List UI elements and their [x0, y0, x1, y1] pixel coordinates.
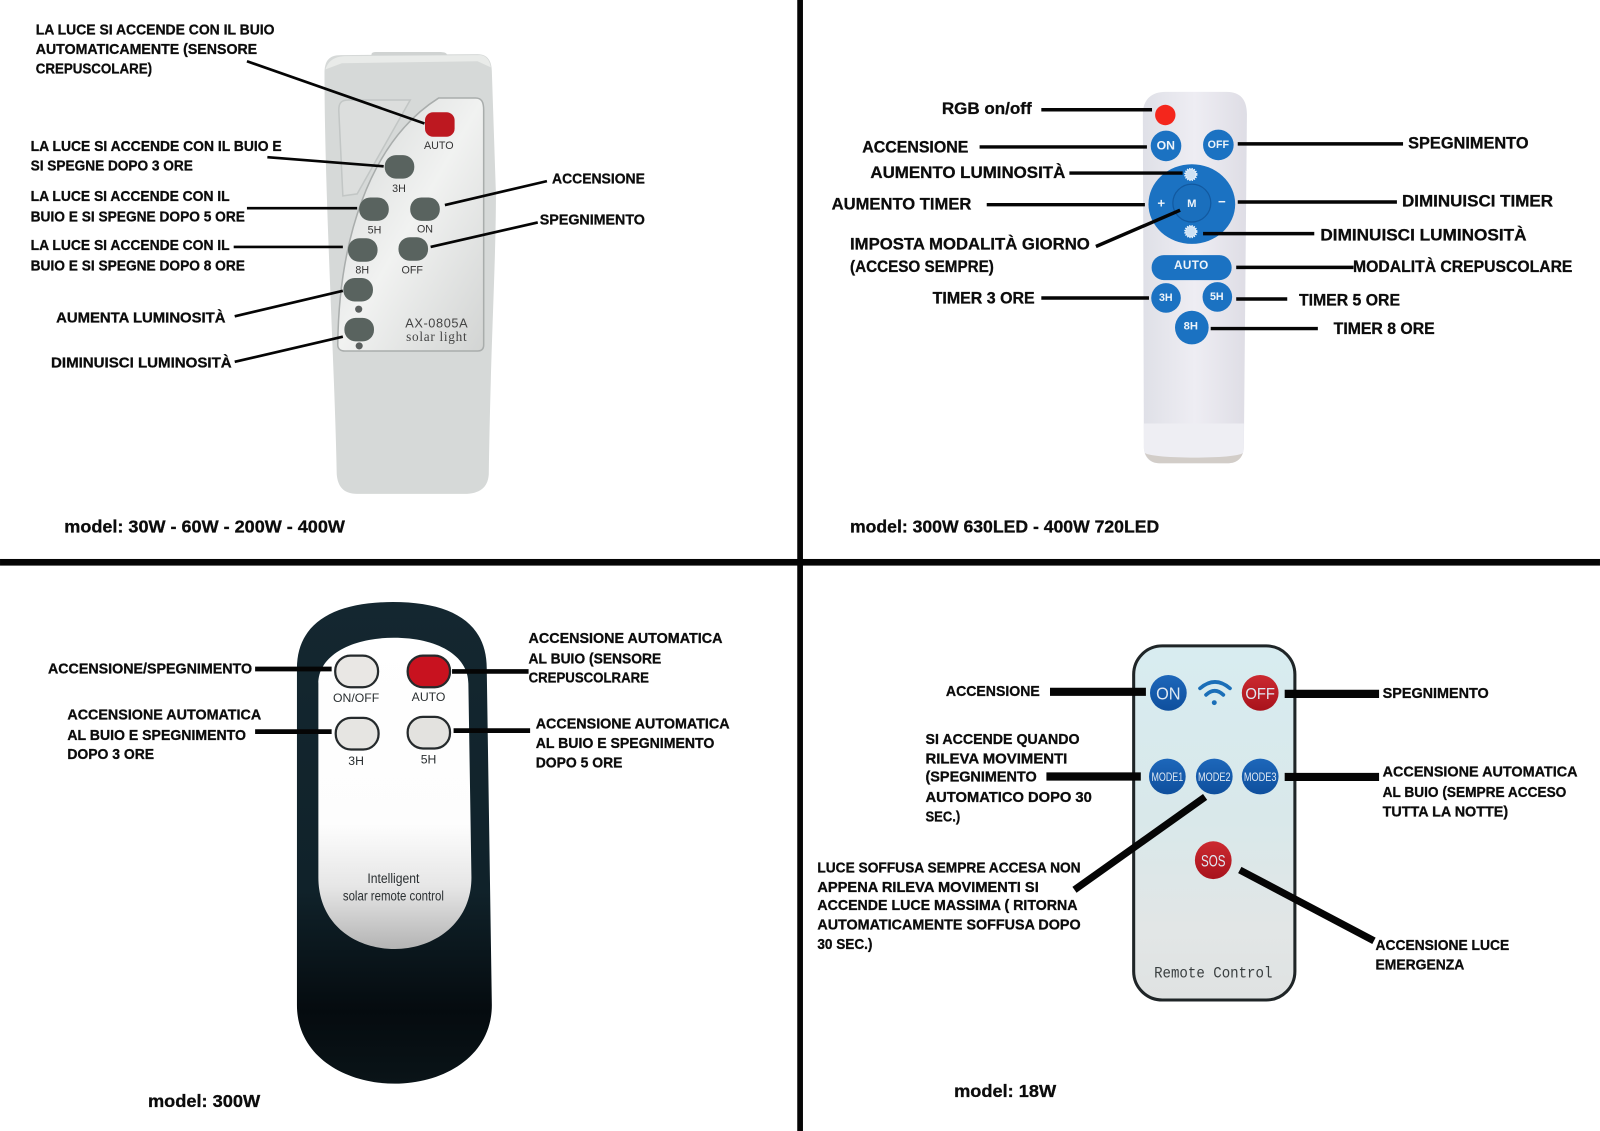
callout: sos: EMERGENZA [1375, 957, 1465, 973]
callout: diminuisci luminosita [51, 337, 343, 371]
callout: mode 1: RILEVA MOVIMENTI [926, 751, 1067, 767]
button labels: ON [417, 224, 433, 236]
callout: timer 5 ore: TIMER 5 ORE [1299, 291, 1400, 310]
button labels: Intelligent [367, 871, 419, 887]
button labels: 8H [355, 264, 369, 276]
callout: accensione: ACCENSIONE [552, 172, 645, 188]
button labels: AX-0805A [405, 316, 468, 331]
callout: sensore crepuscolare [36, 23, 424, 123]
callout: accensione: ACCENSIONE [862, 138, 968, 157]
blue buttons [1148, 130, 1235, 344]
button labels: ON/OFF [333, 691, 379, 705]
button labels: solar light [406, 329, 467, 344]
callout: 5 ore [454, 717, 730, 771]
callout: 3 ore [67, 707, 332, 763]
panel: remote model 18W [817, 646, 1578, 1101]
button labels: AUTO [1174, 259, 1209, 272]
button labels: OFF [1208, 139, 1230, 151]
callout: accensione: ACCENSIONE [946, 684, 1040, 700]
callout: sensore crepuscolare: CREPUSCOLARE) [36, 61, 152, 77]
callout: spegnimento [431, 212, 645, 247]
callout: mode 1: AUTOMATICO DOPO 30 [926, 790, 1092, 806]
callout: aumenta luminosita: AUMENTA LUMINOSITÀ [56, 309, 226, 326]
callout: 3 ore: LA LUCE SI ACCENDE CON IL BUIO E [31, 139, 282, 155]
callout: mode 2 [817, 797, 1205, 953]
callout: diminuisci timer: DIMINUISCI TIMER [1402, 192, 1553, 211]
callout: 5 ore: ACCENSIONE AUTOMATICA [536, 717, 730, 733]
callout: timer 8 ore: TIMER 8 ORE [1334, 319, 1435, 338]
button labels: MODE2 [1198, 770, 1231, 784]
callout: sos [1240, 870, 1509, 973]
button labels [1152, 683, 1277, 870]
callout: aumento luminosita: AUMENTO LUMINOSITÀ [870, 163, 1065, 182]
button labels: M [1187, 198, 1197, 210]
callout: aumenta luminosita [56, 291, 343, 326]
model label: model: 300W 630LED - 400W 720LED [850, 517, 1159, 537]
red button [1155, 105, 1176, 125]
button labels: 8H [1184, 321, 1198, 333]
button labels: ON [1157, 138, 1175, 152]
callout: diminuisci luminosita: DIMINUISCI LUMINOSITÀ [51, 354, 232, 371]
callout: auto [452, 631, 723, 687]
button labels: + [1157, 196, 1165, 211]
model label: model: 30W - 60W - 200W - 400W [64, 517, 345, 537]
panel: remote model 300W 630LED - 400W 720LED [832, 92, 1572, 537]
callout: sos: ACCENSIONE LUCE [1375, 938, 1509, 954]
icon: wifi [1200, 682, 1230, 705]
button labels: MODE3 [1244, 770, 1277, 784]
callout: accensione/spegnimento: ACCENSIONE/SPEGNIMENTO [48, 661, 252, 677]
button labels: 5H [421, 752, 436, 766]
remote body: pale blue [1134, 646, 1295, 1000]
button labels: MODE1 [1152, 770, 1183, 784]
remote body: black [297, 602, 492, 1084]
callout: mode 3 [1285, 765, 1578, 820]
callout: aumento timer: AUMENTO TIMER [832, 195, 971, 214]
remote body: grey [324, 52, 496, 494]
callout: 8 ore: BUIO E SI SPEGNE DOPO 8 ORE [31, 258, 245, 274]
callout: spegnimento: SPEGNIMENTO [1408, 133, 1529, 152]
callout: auto: AL BUIO (SENSORE [529, 651, 661, 667]
callout: sensore crepuscolare: AUTOMATICAMENTE (SENSORE [36, 42, 257, 58]
callout: mode 3: ACCENSIONE AUTOMATICA [1383, 765, 1578, 781]
button labels [333, 690, 445, 904]
buttons [335, 656, 450, 749]
callout: mode 2: LUCE SOFFUSA SEMPRE ACCESA NON [817, 860, 1081, 876]
callout: auto: ACCENSIONE AUTOMATICA [529, 631, 723, 647]
button labels: AUTO [412, 690, 445, 704]
panel: remote model 300W [48, 602, 730, 1111]
button labels: OFF [402, 264, 423, 276]
callout: modalita giorno: (ACCESO SEMPRE) [850, 257, 994, 276]
callout: mode 3: AL BUIO (SEMPRE ACCESO [1383, 785, 1566, 801]
button labels: − [1218, 194, 1226, 209]
remote body: white [1143, 92, 1247, 463]
button labels: 3H [1159, 292, 1173, 304]
icon: brightness down [1185, 226, 1196, 237]
buttons [343, 112, 455, 349]
callout: modalita giorno [850, 210, 1180, 276]
callout: mode 1 [926, 732, 1141, 825]
button labels [1157, 138, 1230, 333]
button labels: OFF [1245, 686, 1275, 703]
button labels: 5H [1210, 291, 1224, 303]
callout: 3 ore: ACCENSIONE AUTOMATICA [67, 707, 261, 723]
buttons [1149, 675, 1279, 879]
callout: 3 ore: AL BUIO E SPEGNIMENTO [67, 728, 246, 744]
callout: sensore crepuscolare: LA LUCE SI ACCENDE CON IL BUIO [36, 23, 274, 39]
callout: mode 1: (SPEGNIMENTO [926, 770, 1037, 786]
button labels: 5H [368, 225, 381, 237]
callout: 5 ore: BUIO E SI SPEGNE DOPO 5 ORE [31, 209, 245, 225]
callout: rgb: RGB on/off [942, 99, 1032, 118]
icon: brightness up [1185, 169, 1196, 180]
button labels: 3H [348, 754, 364, 768]
callout: mode 3: TUTTA LA NOTTE) [1383, 804, 1508, 820]
callout: mode 1: SEC.) [926, 809, 960, 825]
callout: mode 1: SI ACCENDE QUANDO [926, 732, 1080, 748]
button labels: SOS [1201, 852, 1226, 870]
model label: model: 300W [148, 1091, 260, 1111]
callout: mode 2: 30 SEC.) [817, 937, 872, 953]
callout: 3 ore [31, 139, 384, 174]
button labels: solar remote control [343, 888, 444, 904]
callout: diminuisci luminosita: DIMINUISCI LUMINOSITÀ [1320, 225, 1527, 244]
callout: timer 3 ore: TIMER 3 ORE [933, 289, 1035, 308]
callout: mode 2: AUTOMATICAMENTE SOFFUSA DOPO [817, 918, 1081, 934]
callout: accensione [445, 172, 645, 205]
callout: 5 ore: AL BUIO E SPEGNIMENTO [536, 736, 714, 752]
callout: modalita crepuscolare: MODALITÀ CREPUSCOLARE [1353, 257, 1572, 276]
model label: model: 18W [954, 1081, 1056, 1101]
callout: 5 ore: DOPO 5 ORE [536, 755, 623, 771]
button labels: 3H [392, 183, 406, 195]
remote caption: Remote Control [1154, 965, 1272, 983]
callout: auto: CREPUSCOLRARE [529, 671, 649, 687]
callout: spegnimento: SPEGNIMENTO [540, 212, 645, 228]
callout: 8 ore: LA LUCE SI ACCENDE CON IL [31, 238, 230, 254]
callout: 5 ore: LA LUCE SI ACCENDE CON IL [31, 189, 230, 205]
callout: 5 ore [31, 189, 357, 225]
callout: 8 ore [31, 238, 343, 274]
callout: spegnimento: SPEGNIMENTO [1383, 686, 1489, 702]
panel: remote model 30W-400W [31, 23, 645, 537]
callout: 3 ore: SI SPEGNE DOPO 3 ORE [31, 158, 193, 174]
callout: modalita giorno: IMPOSTA MODALITÀ GIORNO [850, 234, 1090, 253]
button labels [355, 140, 468, 344]
button labels: AUTO [424, 140, 454, 152]
callout: 3 ore: DOPO 3 ORE [67, 747, 154, 763]
callout: mode 2: ACCENDE LUCE MASSIMA ( RITORNA [817, 898, 1078, 914]
button labels: ON [1156, 683, 1181, 703]
callout: mode 2: APPENA RILEVA MOVIMENTI SI [817, 880, 1039, 896]
